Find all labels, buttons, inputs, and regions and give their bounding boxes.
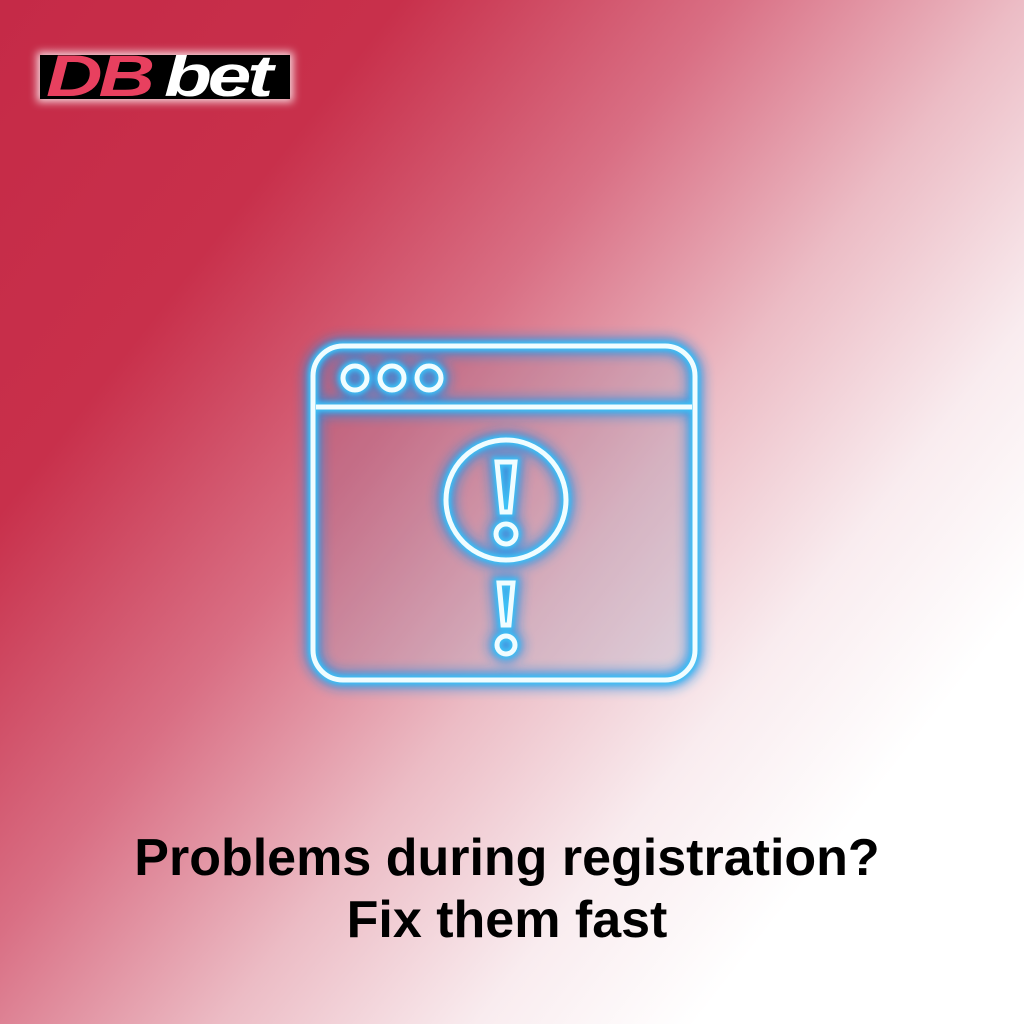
title text: Problems during registration? (134, 829, 880, 887)
title text: Fix them fast (347, 891, 667, 949)
title text (134, 829, 880, 949)
logo: DBbet (40, 55, 290, 99)
